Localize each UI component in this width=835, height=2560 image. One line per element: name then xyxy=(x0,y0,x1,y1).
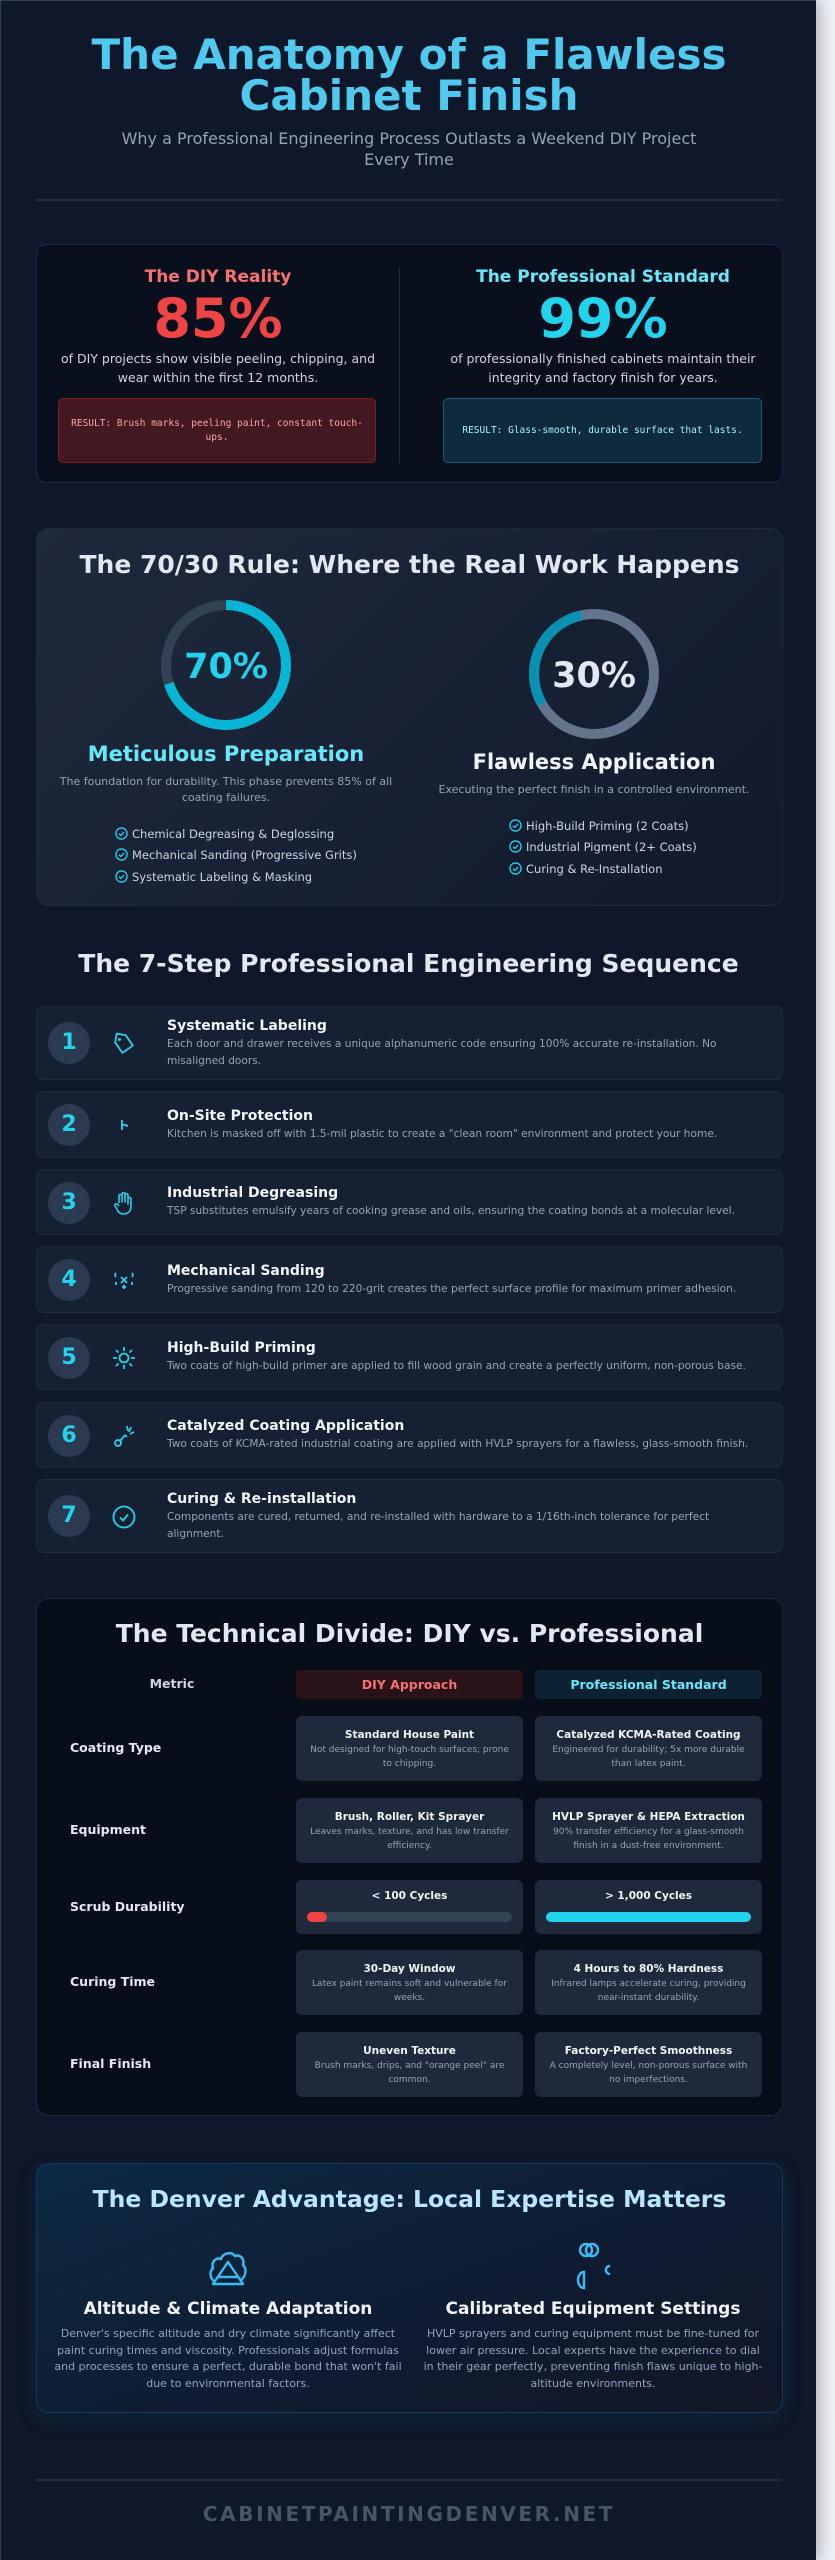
Pro stat column: 99% xyxy=(538,287,668,350)
row: final finish: Final Finish xyxy=(70,2056,151,2071)
row: curing time: Curing Time xyxy=(70,1974,155,1989)
row: curing time: Infrared lamps accelerate curing, providing near-instant durability. xyxy=(551,1978,746,2002)
step 6: Two coats of KCMA-rated industrial coating are applied with HVLP sprayers for a flawless, glass-smooth finish. xyxy=(167,1438,748,1450)
step 5: High-Build Priming xyxy=(167,1340,316,1356)
row: scrub durability xyxy=(70,1880,762,1934)
heading: The Denver Advantage: Local Expertise Matters xyxy=(93,2185,726,2213)
step 4: Progressive sanding from 120 to 220-grit creates the perfect surface profile for maximum primer adhesion. xyxy=(167,1282,736,1294)
DIY stat column xyxy=(61,267,375,385)
step 3 xyxy=(36,1169,783,1235)
left checklist: Mechanical Sanding (Progressive Grits) xyxy=(132,848,357,862)
row: scrub durability: < 100 Cycles xyxy=(372,1890,447,1902)
step 2: On-Site Protection xyxy=(167,1108,313,1124)
DIY stat column: of DIY projects show visible peeling, chipping, and wear within the first 12 months. xyxy=(61,351,375,385)
table header: Metric xyxy=(150,1676,194,1691)
row: coating type: Engineered for durability; 5x more durable than latex paint. xyxy=(552,1744,745,1768)
left block: altitude xyxy=(54,2299,402,2390)
right column text: Flawless Application xyxy=(473,750,715,774)
left block: altitude: Denver's specific altitude and dry climate significantly affect paint curing times and viscosity. Professionals adjust formulas and processes to ensure a perfect, durable bond that won't fail due to environmental factors. xyxy=(54,2327,402,2390)
row: scrub durability: Scrub Durability xyxy=(70,1899,185,1914)
DIY result box xyxy=(58,398,376,463)
step 3: 3 xyxy=(61,1190,77,1215)
row: final finish: Factory-Perfect Smoothness xyxy=(565,2044,732,2056)
left checklist: Chemical Degreasing & Deglossing xyxy=(132,827,334,841)
right column text: Executing the perfect finish in a controlled environment. xyxy=(439,783,749,796)
row: equipment: HVLP Sprayer & HEPA Extraction xyxy=(552,1810,745,1822)
row: coating type: Standard House Paint xyxy=(345,1728,474,1740)
icon: mountain cloud xyxy=(209,2252,247,2286)
title: The Anatomy of a Flawless xyxy=(92,30,726,79)
step 4: Mechanical Sanding xyxy=(167,1262,325,1278)
table header: DIY Approach xyxy=(362,1677,457,1692)
DIY stat column: The DIY Reality xyxy=(145,267,291,287)
Pro stat column: of professionally finished cabinets maintain their integrity and factory finish for years. xyxy=(450,351,756,385)
right block: equipment: HVLP sprayers and curing equipment must be fine-tuned for lower air pressure. Local experts have the experience to dial in their gear perfectly, preventing finish flaws unique to high-altitude environments. xyxy=(424,2327,762,2390)
step 7: 7 xyxy=(61,1503,77,1528)
panel: stats comparison xyxy=(36,244,783,483)
right checklist xyxy=(509,819,697,876)
step 1: 1 xyxy=(61,1030,77,1055)
right checklist: Curing & Re-Installation xyxy=(526,862,663,876)
step 7: Curing & Re-installation xyxy=(167,1490,356,1506)
row: final finish xyxy=(70,2032,762,2097)
step 5 xyxy=(36,1324,783,1390)
row: coating type: Not designed for high-touch surfaces; prone to chipping. xyxy=(310,1744,509,1768)
table header xyxy=(150,1670,762,1699)
right block: equipment xyxy=(424,2299,762,2390)
ring: 70%: 70% xyxy=(184,647,268,687)
footer: website: CABINETPAINTINGDENVER.NET xyxy=(203,2502,615,2526)
ring: 70% xyxy=(161,600,291,730)
step 2: Kitchen is masked off with 1.5-mil plastic to create a "clean room" environment and protect your home. xyxy=(167,1128,717,1140)
right block: equipment: Calibrated Equipment Settings xyxy=(446,2299,740,2319)
row: equipment: Leaves marks, texture, and has low transfer efficiency. xyxy=(310,1826,509,1850)
step 6 xyxy=(36,1402,783,1468)
left checklist: Systematic Labeling & Masking xyxy=(132,870,312,884)
left block: altitude: Altitude & Climate Adaptation xyxy=(84,2299,372,2319)
left checklist xyxy=(115,827,357,884)
title: Cabinet Finish xyxy=(240,71,578,120)
title xyxy=(92,30,726,120)
step 1 xyxy=(36,1006,783,1080)
DIY stat column: 85% xyxy=(153,287,283,350)
left column text: The foundation for durability. This phase prevents 85% of all coating failures. xyxy=(60,775,392,804)
row: equipment xyxy=(70,1798,762,1863)
Pro stat column: The Professional Standard xyxy=(476,267,730,287)
table header: Professional Standard xyxy=(570,1677,727,1692)
step 3: Industrial Degreasing xyxy=(167,1185,338,1201)
row: curing time: 4 Hours to 80% Hardness xyxy=(574,1962,723,1974)
left column text: Meticulous Preparation xyxy=(88,742,364,766)
right checklist: High-Build Priming (2 Coats) xyxy=(526,819,689,833)
step 5: Two coats of high-build primer are applied to fill wood grain and create a perfectly uniform, non-porous base. xyxy=(167,1360,746,1372)
panel: technical divide table xyxy=(36,1598,783,2116)
right column text xyxy=(439,750,749,796)
heading: 7-step sequence: The 7-Step Professional Engineering Sequence xyxy=(78,949,739,978)
ring: 30%: 30% xyxy=(552,656,636,696)
step 2: 2 xyxy=(61,1112,77,1137)
row: equipment: 90% transfer efficiency for a glass-smooth finish in a dust-free environment. xyxy=(553,1826,744,1850)
row: equipment: Brush, Roller, Kit Sprayer xyxy=(335,1810,484,1822)
panel: Denver advantage xyxy=(36,2163,783,2413)
row: coating type: Catalyzed KCMA-Rated Coating xyxy=(556,1728,741,1740)
DIY result box: RESULT: Brush marks, peeling paint, constant touch-ups. xyxy=(71,418,363,442)
row: final finish: Brush marks, drips, and "orange peel" are common. xyxy=(315,2060,504,2084)
left column text xyxy=(60,742,392,804)
step 4 xyxy=(36,1246,783,1313)
step 5: 5 xyxy=(61,1345,77,1370)
step 1: Systematic Labeling xyxy=(167,1018,327,1034)
step 4: 4 xyxy=(61,1267,77,1292)
Pro result box: RESULT: Glass-smooth, durable surface that lasts. xyxy=(462,424,743,436)
step 7 xyxy=(36,1479,783,1553)
row: coating type xyxy=(70,1716,762,1781)
row: coating type: Coating Type xyxy=(70,1740,161,1755)
row: curing time xyxy=(70,1950,762,2015)
step 6: Catalyzed Coating Application xyxy=(167,1418,404,1434)
step 3: TSP substitutes emulsify years of cooking grease and oils, ensuring the coating bonds at a molecular level. xyxy=(167,1205,735,1217)
panel: 70/30 rule xyxy=(36,528,783,906)
row: final finish: A completely level, non-porous surface with no imperfections. xyxy=(550,2060,747,2084)
icon: equipment settings xyxy=(576,2242,610,2290)
step 1: Each door and drawer receives a unique alphanumeric code ensuring 100% accurate re-installation. No misaligned doors. xyxy=(167,1038,717,1066)
row: scrub durability: > 1,000 Cycles xyxy=(605,1890,692,1902)
subtitle: Why a Professional Engineering Process Outlasts a Weekend DIY Project Every Time xyxy=(122,129,696,169)
heading: The 70/30 Rule: Where the Real Work Happens xyxy=(79,550,740,579)
row: curing time: 30-Day Window xyxy=(363,1962,456,1974)
step 2 xyxy=(36,1091,783,1158)
heading: The Technical Divide: DIY vs. Professional xyxy=(116,1619,703,1648)
row: equipment: Equipment xyxy=(70,1822,146,1837)
row: final finish: Uneven Texture xyxy=(363,2044,456,2056)
row: curing time: Latex paint remains soft and vulnerable for weeks. xyxy=(312,1978,507,2002)
step 7: Components are cured, returned, and re-installed with hardware to a 1/16th-inch tolerance for perfect alignment. xyxy=(167,1510,709,1540)
right checklist: Industrial Pigment (2+ Coats) xyxy=(526,840,697,854)
step 6: 6 xyxy=(61,1423,77,1448)
Pro result box xyxy=(443,398,762,463)
Pro stat column xyxy=(450,267,756,385)
ring: 30% xyxy=(529,609,659,739)
